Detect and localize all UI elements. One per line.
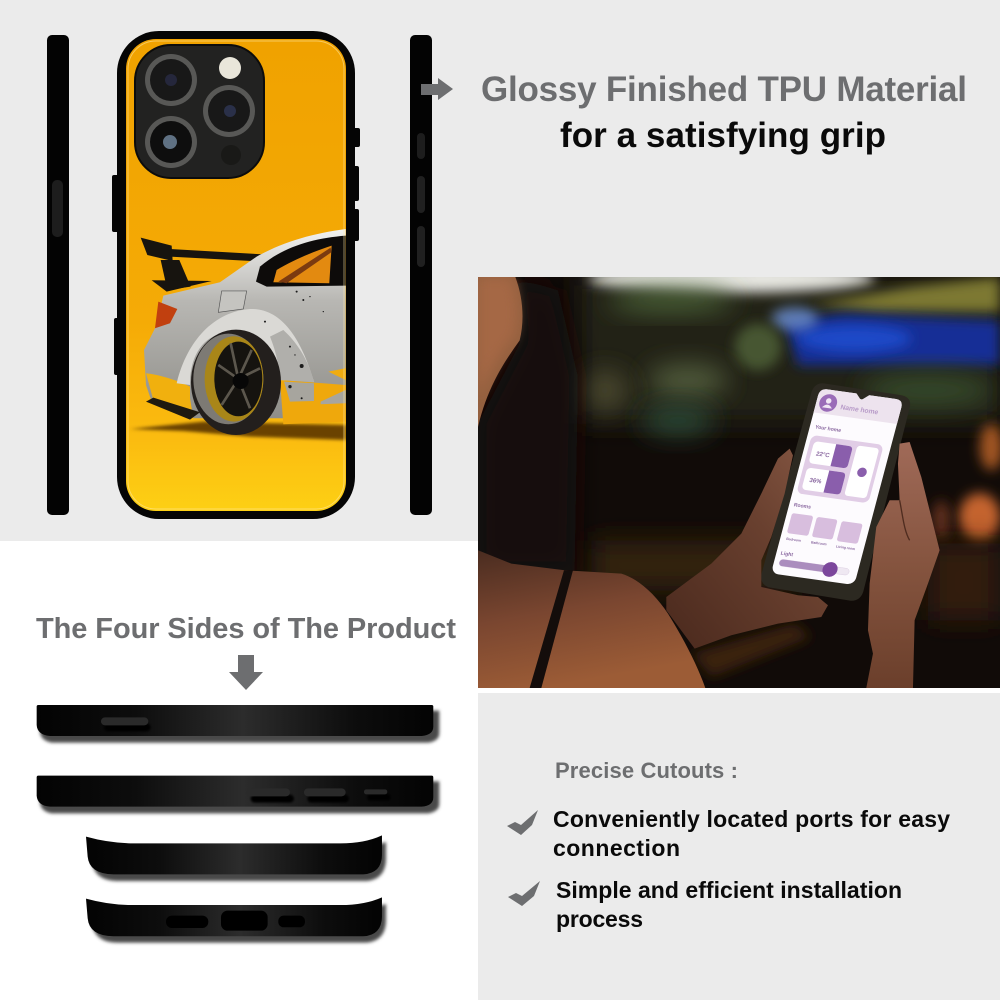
camera island [135,45,264,178]
phone screen [771,388,903,585]
lens bottom left [145,116,197,168]
top edge [37,705,439,743]
four side edges [37,705,439,943]
home panel [796,435,884,503]
arrow right [421,78,453,100]
ground shadow [130,422,346,440]
side view strip left [47,35,69,515]
case frame [117,31,355,519]
paint speckles [264,291,324,399]
feature text 1: Conveniently located ports for easy [553,806,950,832]
splitter [146,398,200,420]
profile icon [819,394,838,412]
fuel flap [218,291,247,312]
blurred backdrop [578,265,1000,677]
heading: material: for a satisfying grip [560,116,886,155]
arrow down [229,655,263,690]
add card [844,445,879,498]
phone case back with car artwork [112,31,360,519]
photo: hands holding smartphone [478,265,1000,688]
heading: material [481,70,967,155]
feature text 2: process [556,906,643,932]
bra strap [530,570,573,688]
light slider [778,559,850,575]
heading: precise cutouts: Precise Cutouts : [555,758,738,783]
screen labels: Bedroom [786,537,801,543]
spoiler [141,238,262,292]
sensor [221,145,241,165]
right hand [866,442,940,688]
screen labels: Rooms [793,502,812,511]
yellow back panel [126,39,346,511]
room icons [787,513,813,536]
phone body [761,383,910,601]
feature text 2: Simple and efficient installation [556,877,902,903]
screen labels: Living room [836,545,856,551]
screen labels: Light [780,551,794,558]
window [256,236,346,287]
screen labels [780,404,878,556]
glossy inner outline [128,41,344,509]
heading: four sides: The Four Sides of The Product [36,613,456,645]
tire [191,330,281,435]
icon: check 1 [507,810,538,835]
feature text 2 [556,877,902,932]
humidity card [801,467,846,495]
feature text 1: connection [553,835,680,861]
heading: material: Glossy Finished TPU Material [481,70,967,109]
screen labels: 36% [808,477,823,486]
car body upper [144,229,346,418]
wheel face [214,342,262,416]
bottom edge [86,897,386,943]
person shoulder [478,550,705,688]
person face [478,277,523,427]
smartphone [761,383,910,601]
lower yellow bumper [146,373,193,418]
car artwork [130,229,346,440]
screen labels: Name home [840,404,879,416]
lens top left [145,54,197,106]
icon: check 2 [508,881,540,906]
screen labels: Bathroom [810,540,827,546]
rim barrel [193,334,263,424]
feature text 1 [553,806,950,861]
temp card [808,441,853,469]
second edge [37,776,439,813]
screen labels: Your home [814,424,842,434]
fender flare [177,309,314,385]
wheel spokes [218,343,260,408]
screen labels: 22°C [815,451,831,459]
flash [219,57,241,79]
lens right [203,85,255,137]
notch [856,393,870,400]
person hair [569,339,590,424]
case buttons [112,128,360,375]
third edge [86,835,386,881]
side view strip right [410,35,432,515]
tail light [155,302,177,328]
screen header [814,388,903,424]
left hand [666,449,828,649]
